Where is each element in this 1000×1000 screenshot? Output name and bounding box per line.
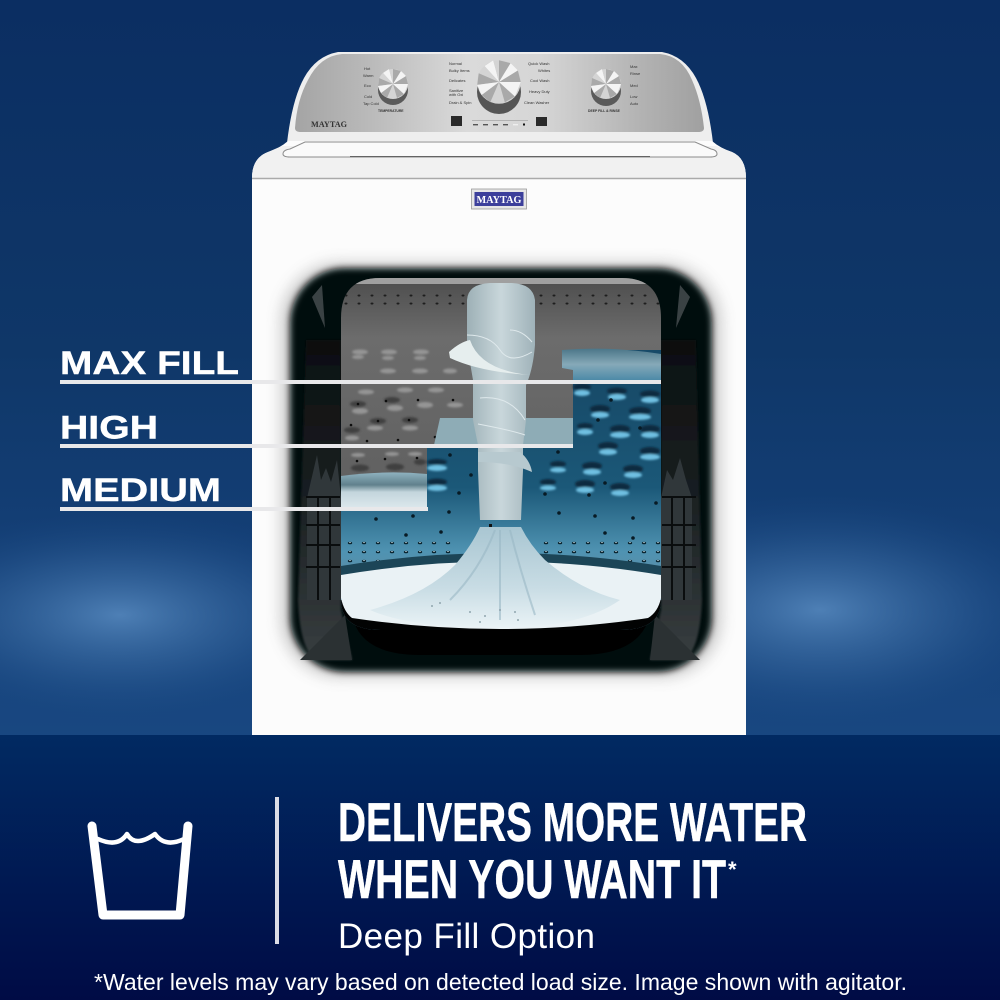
- level label: max fill: MAX FILL: [60, 345, 239, 381]
- window shadow: [280, 262, 722, 678]
- tub window: [290, 268, 712, 672]
- floor holes: [431, 602, 519, 623]
- console labels: Auto: [630, 101, 639, 106]
- console labels: Quick Wash: [528, 61, 549, 66]
- washer floor: [341, 562, 661, 629]
- heading: [338, 791, 807, 910]
- level label: medium: MEDIUM: [60, 472, 221, 508]
- heading: DELIVERS MORE WATER: [338, 791, 807, 853]
- level label: high: [60, 410, 573, 448]
- agitator wave lines: [467, 330, 532, 435]
- dry dimples: [345, 350, 463, 457]
- maytag badge: [472, 189, 526, 209]
- stainless control panel: [295, 54, 704, 132]
- stepped water volume: [341, 350, 661, 640]
- console labels: Max: [630, 64, 638, 69]
- console labels: Clean Washer: [524, 100, 550, 105]
- knob: cycle: [477, 60, 521, 114]
- blue dimples: [427, 384, 660, 496]
- agitator: [370, 283, 620, 628]
- app button: [536, 117, 547, 126]
- bottom band: [0, 735, 1000, 1000]
- console labels: Tap Cold: [363, 101, 379, 106]
- console labels: Med: [630, 83, 638, 88]
- lower tub shadow: [352, 615, 650, 655]
- status lights: [472, 120, 528, 126]
- max fill surface: [562, 349, 661, 380]
- washer console: [287, 52, 713, 143]
- divider: [275, 797, 279, 944]
- base collar rivets: [489, 524, 492, 527]
- drum interior: [341, 278, 661, 640]
- right tub wall: [650, 285, 702, 660]
- medium fill surface: [341, 472, 427, 508]
- console labels: Whites: [538, 68, 550, 73]
- console labels: Low: [630, 94, 637, 99]
- console brand: MAYTAG: [311, 120, 347, 129]
- console labels: Cool Wash: [530, 78, 549, 83]
- lower perforations: [348, 542, 450, 562]
- blue rivets: [374, 398, 658, 540]
- knob: deep fill: [591, 69, 621, 106]
- subheading: Deep Fill Option: [338, 917, 595, 956]
- console labels: Eco: [364, 83, 372, 88]
- console labels: DEEP FILL & RINSE: [588, 109, 621, 113]
- console labels: Bulky Items: [449, 68, 470, 73]
- agitator base: [370, 527, 620, 628]
- under-floor shadow: [341, 600, 661, 632]
- console labels: with Oxi: [449, 92, 463, 97]
- knob: temperature: [378, 69, 408, 105]
- dry rivets: [350, 399, 454, 462]
- console labels: Rinse: [630, 71, 641, 76]
- level label: high: HIGH: [60, 410, 158, 446]
- console labels: Delicates: [449, 78, 465, 83]
- dry dimple shadows: [344, 397, 426, 472]
- heading: WHEN YOU WANT IT: [338, 848, 726, 910]
- start button: [451, 116, 462, 126]
- maytag badge: MAYTAG: [476, 194, 522, 206]
- top perforations: [344, 294, 660, 304]
- left tub wall: [298, 285, 352, 660]
- agitator fin lower: [478, 452, 532, 472]
- top rim: [341, 278, 661, 284]
- high fill surface: [434, 418, 573, 445]
- drum floor ring: [341, 554, 661, 575]
- washer body: [252, 141, 746, 735]
- agitator fin top: [449, 340, 530, 375]
- level label: medium: [60, 472, 428, 511]
- console labels: Cold: [364, 94, 372, 99]
- base ridges: [450, 530, 535, 620]
- footnote: *Water levels may vary based on detected load size. Image shown with agitator.: [94, 969, 907, 995]
- level label: max fill: [60, 345, 661, 384]
- console labels: [363, 61, 641, 113]
- lid: [252, 142, 746, 178]
- console labels: Warm: [363, 73, 374, 78]
- console labels: Heavy Duty: [529, 89, 550, 94]
- lower perforations right: [544, 542, 660, 562]
- washer: [252, 52, 746, 735]
- console labels: Drain & Spin: [449, 100, 471, 105]
- console labels: Normal: [449, 61, 462, 66]
- dry drum wall: [341, 278, 661, 476]
- console labels: Hot: [364, 66, 371, 71]
- console labels: TEMPERATURE: [378, 109, 404, 113]
- icon: water cup: [92, 826, 188, 915]
- heading: *: [728, 857, 737, 882]
- console labels: Sanitize: [449, 88, 464, 93]
